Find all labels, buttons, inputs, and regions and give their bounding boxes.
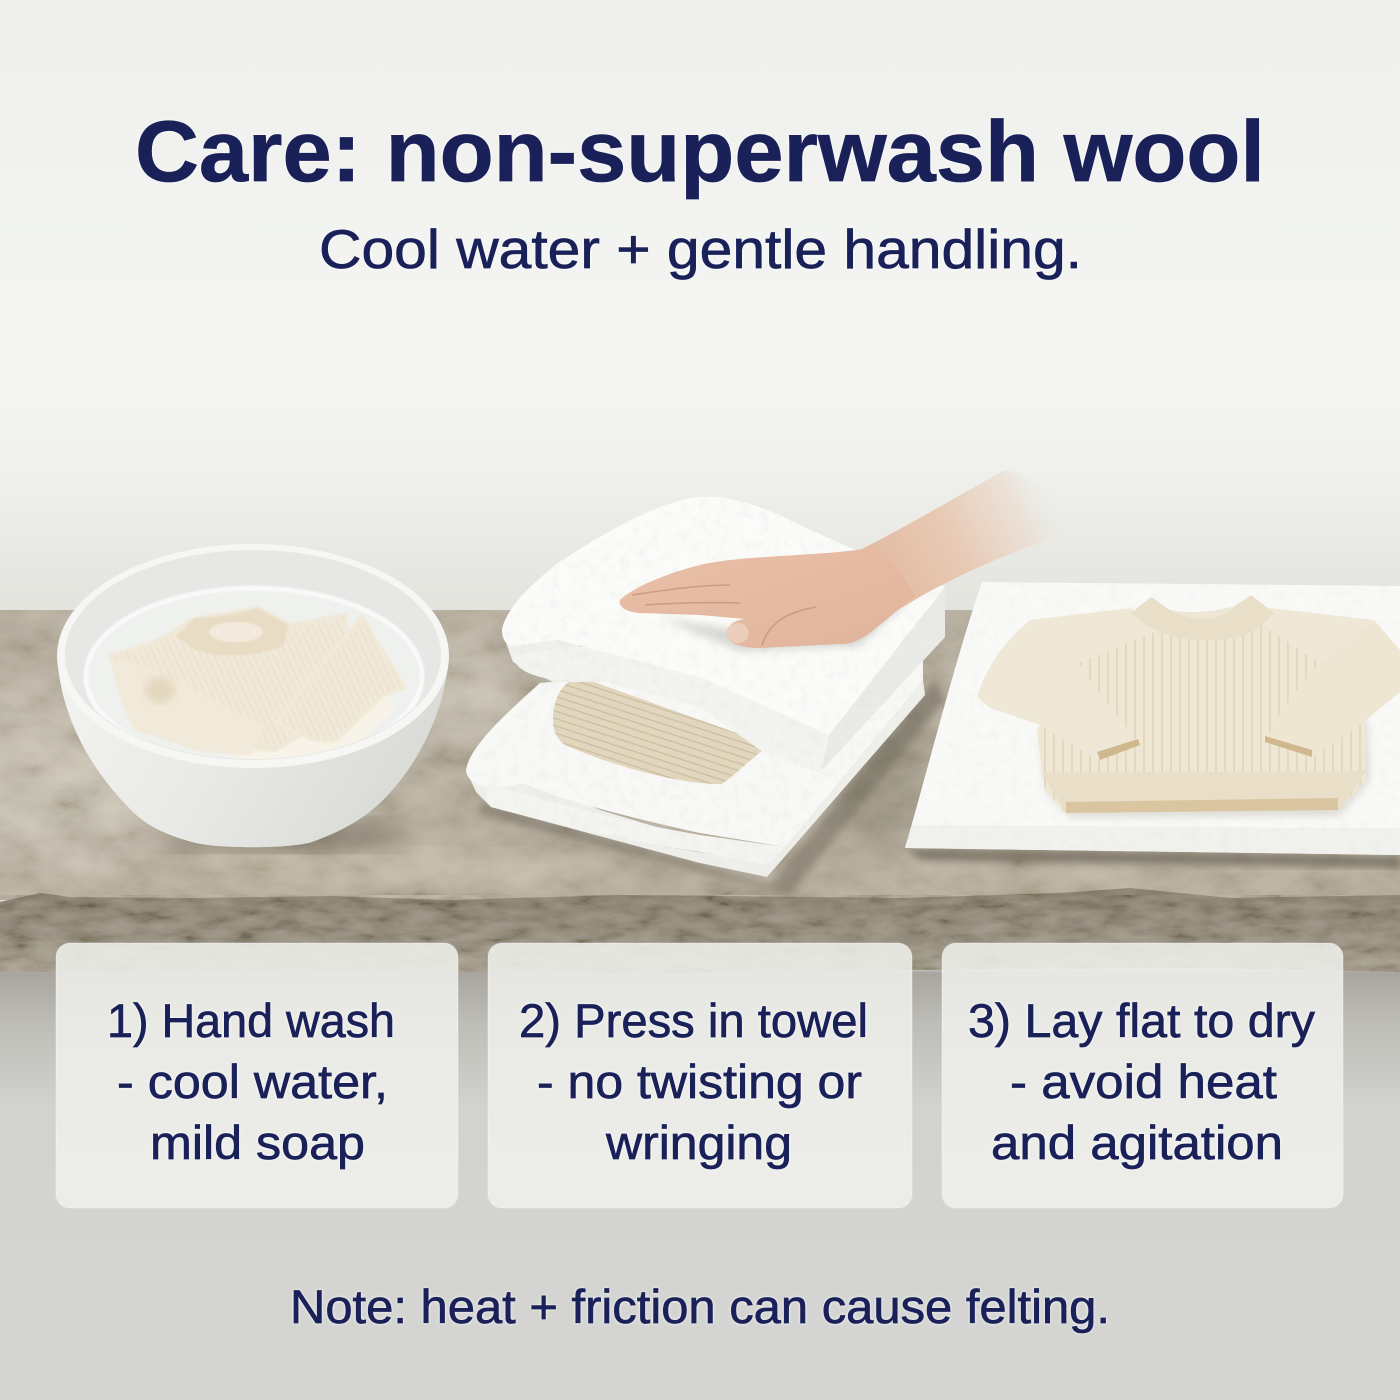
towel shadow: [480, 680, 945, 895]
bottom towel layer: [491, 680, 925, 877]
hand pressing towel: [620, 470, 1092, 652]
foam line: [84, 586, 424, 732]
towel texture: [582, 734, 653, 824]
card 3 panel: [942, 943, 1343, 1208]
right shoulder: [1262, 608, 1374, 663]
lower towel front: [486, 785, 785, 865]
note: Note: heat + friction can cause felting.: [290, 1280, 1110, 1333]
card: step 2: [488, 943, 912, 1208]
flat towel shadow: [905, 848, 1400, 868]
sweater shadow: [1040, 720, 1370, 818]
thumbnail: [727, 623, 749, 643]
light patches: [0, 700, 180, 880]
hem: [1042, 771, 1366, 813]
water: [90, 592, 418, 758]
lower towel: [466, 650, 923, 847]
card 3 text: - avoid heat: [1010, 1055, 1277, 1108]
upper towel backing: [505, 635, 610, 682]
flat towel front edge: [905, 825, 1400, 855]
right sleeve: [302, 614, 406, 744]
card 1 panel: [56, 943, 458, 1208]
hand: [620, 548, 915, 648]
underlying body: [236, 697, 393, 759]
cuffs: [1097, 739, 1140, 760]
flat towel with drying sweater: [905, 582, 1400, 868]
washing sweater: [110, 608, 405, 765]
finger lines: [632, 585, 816, 645]
card 2 text: [519, 994, 868, 1169]
flat towel: [905, 582, 1400, 855]
neck opening: [1170, 606, 1235, 619]
title: Care: non-superwash wool: [135, 104, 1265, 200]
collar: [1131, 595, 1274, 640]
card 3 text: and agitation: [991, 1116, 1283, 1169]
left sleeve: [977, 620, 1140, 760]
stone noise: [0, 610, 1400, 895]
sweater torso: [110, 608, 350, 750]
card 3 text: 3) Lay flat to dry: [968, 994, 1316, 1047]
bowl body: [57, 655, 449, 847]
subtitle: Cool water + gentle handling.: [319, 218, 1082, 280]
wet stain: [145, 677, 175, 703]
card 1 text: - cool water,: [117, 1055, 388, 1108]
card 2 text: - no twisting or: [537, 1055, 862, 1108]
upper towel top layer: [502, 497, 945, 735]
card: step 1: [56, 943, 458, 1208]
folded towel stack with knit roll: [465, 495, 950, 895]
bowl with sweater in water: [57, 544, 449, 851]
stone slab: [0, 610, 1400, 975]
slab front face: [0, 888, 1400, 975]
card 2 text: 2) Press in towel: [519, 994, 868, 1047]
bowl interior and water: [65, 550, 441, 760]
towel edge: [822, 587, 945, 770]
slab top surface: [0, 610, 1400, 900]
card: step 3: [942, 943, 1343, 1208]
card 2 panel: [488, 943, 912, 1208]
bowl rim: [57, 544, 449, 768]
left sleeve: [116, 681, 252, 756]
knit roll: [553, 677, 770, 784]
card 1 text: 1) Hand wash: [107, 994, 395, 1047]
sweater body: [1037, 620, 1366, 813]
card 2 text: wringing: [605, 1116, 792, 1169]
right sleeve: [1265, 620, 1400, 757]
bowl shadow: [150, 819, 410, 851]
forearm: [860, 470, 1092, 615]
card 1 text: [107, 994, 395, 1169]
hand shadow: [660, 585, 925, 652]
upper towel second layer: [513, 600, 945, 773]
flat towel texture: [905, 582, 1400, 857]
lower towel backing: [466, 770, 767, 865]
collar: [176, 608, 288, 655]
card 1 text: mild soap: [150, 1116, 365, 1169]
card 3 text: [968, 994, 1316, 1169]
left shoulder: [1030, 608, 1160, 663]
